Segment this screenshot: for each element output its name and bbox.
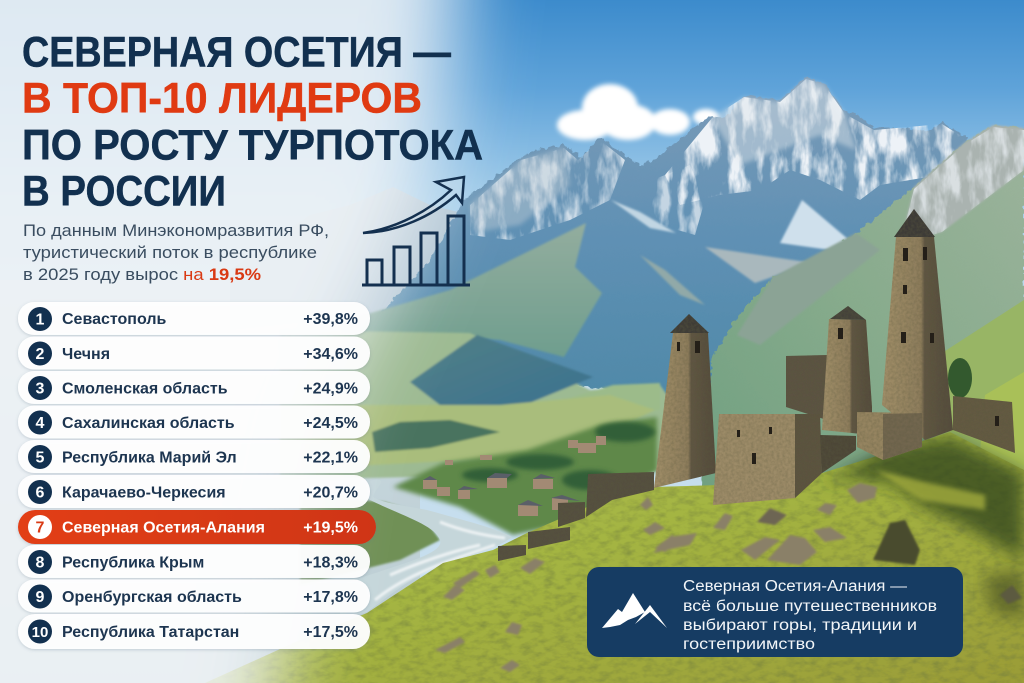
- far right building: [953, 396, 1015, 453]
- row 10: [18, 614, 370, 649]
- far hazy mountain: [230, 187, 500, 330]
- cloud: [557, 84, 719, 140]
- shadow on the hillside: [820, 437, 1024, 560]
- row 3: [18, 371, 370, 404]
- valley hills: [280, 330, 720, 480]
- white haze over left: [0, 0, 517, 683]
- row 6: Карачаево-Черкесия: [62, 484, 226, 502]
- row 9: +17,8%: [303, 589, 358, 606]
- subtitle: [23, 222, 329, 284]
- title: [22, 28, 483, 216]
- row 3: 3: [36, 380, 45, 398]
- row 1: 1: [36, 312, 45, 328]
- right low building: [857, 412, 922, 460]
- row 7 highlighted: [18, 510, 376, 544]
- main mountain range: [370, 77, 968, 400]
- row 4: Сахалинская область: [62, 415, 235, 432]
- river: [340, 480, 512, 620]
- row 1: Севастополь: [62, 311, 166, 328]
- snowfield: [780, 200, 849, 250]
- snow streaks: [665, 79, 966, 205]
- row 2: Чечня: [62, 346, 110, 363]
- tree behind towers: [948, 358, 972, 398]
- tower tall: [882, 237, 953, 440]
- front building: [713, 414, 795, 505]
- row 2: [18, 336, 370, 370]
- towers: [654, 209, 1015, 505]
- icon: mountains: [602, 593, 667, 628]
- green left spur: [340, 223, 602, 357]
- row 7 highlighted: 7: [36, 520, 45, 536]
- subtitle: По данным Минэкономразвития РФ,: [23, 222, 329, 240]
- row 2: 2: [36, 346, 45, 363]
- row 3: +24,9%: [303, 380, 358, 398]
- row 9: Оренбургская область: [62, 589, 242, 606]
- subtitle: в 2025 году вырос на 19,5%: [23, 266, 261, 284]
- foreground slope: [205, 432, 1024, 683]
- row 8: 8: [36, 554, 45, 572]
- tower left: [654, 333, 716, 488]
- row 5: 5: [36, 450, 45, 466]
- tower windows: [677, 247, 999, 464]
- row 7 highlighted: +19,5%: [303, 520, 358, 536]
- row 6: +20,7%: [303, 484, 358, 502]
- row 10: +17,5%: [303, 624, 358, 641]
- row 9: [18, 580, 370, 612]
- low stone walls: [498, 472, 654, 561]
- row 4: 4: [36, 415, 45, 432]
- callout text: выбирают горы, традиции и: [683, 617, 917, 634]
- callout text: Северная Осетия-Алания —: [683, 578, 908, 595]
- rocks on the slope: [435, 483, 1022, 672]
- row 9: 9: [36, 589, 45, 606]
- left river bank: [300, 495, 440, 585]
- row 8: [18, 545, 370, 578]
- right green mountain: [700, 125, 1024, 510]
- row 2: +34,6%: [303, 346, 358, 363]
- callout text: [683, 578, 937, 653]
- row 1: +39,8%: [303, 311, 358, 328]
- row 8: +18,3%: [303, 554, 358, 572]
- row 5: [18, 440, 370, 473]
- title: СЕВЕРНАЯ ОСЕТИЯ —: [22, 28, 451, 76]
- trees and village: [393, 417, 657, 535]
- title: В ТОП-10 ЛИДЕРОВ: [22, 74, 422, 122]
- wall behind: [786, 355, 827, 420]
- subtitle: туристический поток в республике: [23, 244, 317, 262]
- tower middle: [822, 319, 872, 435]
- title: ПО РОСТУ ТУРПОТОКА: [22, 122, 483, 170]
- row 6: 6: [36, 484, 45, 502]
- callout text: всё больше путешественников: [683, 598, 937, 615]
- row 4: [18, 406, 370, 438]
- row 5: +22,1%: [303, 450, 358, 466]
- row 5: Республика Марий Эл: [62, 450, 237, 466]
- row 6: [18, 475, 370, 508]
- title: В РОССИИ: [22, 168, 226, 216]
- callout text: гостеприимство: [683, 636, 815, 653]
- row 7 highlighted: Северная Осетия-Алания: [62, 520, 265, 536]
- callout: [587, 567, 963, 657]
- row 3: Смоленская область: [62, 380, 228, 398]
- ranking list: [18, 302, 376, 649]
- icon: growth chart: [362, 177, 470, 285]
- row 8: Республика Крым: [62, 554, 204, 572]
- row 4: +24,5%: [303, 415, 358, 432]
- row 10: Республика Татарстан: [62, 624, 239, 641]
- row 10: 10: [32, 624, 48, 641]
- row 1: [18, 302, 370, 335]
